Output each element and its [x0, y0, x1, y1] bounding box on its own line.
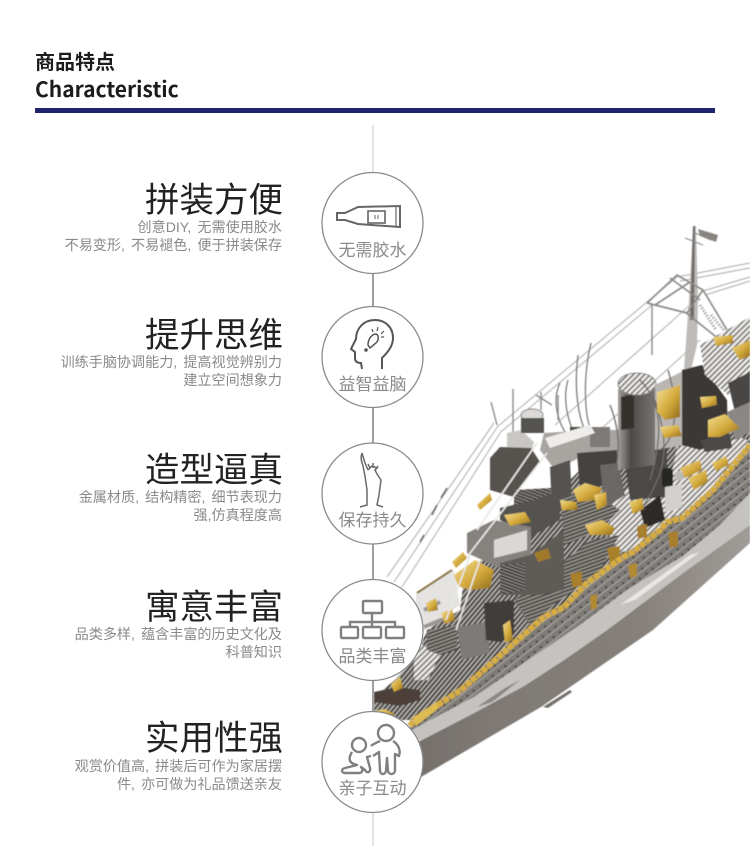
- feature text 3: [79, 452, 283, 522]
- description: 训练手脑协调能力, 提高视觉辨别力: [61, 354, 282, 370]
- ship rigging wires: [387, 263, 750, 587]
- description: [61, 354, 282, 388]
- feature circle 2: brain: [322, 306, 423, 408]
- icon: glue tube: [337, 206, 400, 227]
- description: [75, 758, 282, 792]
- description: 创意DIY, 无需使用胶水: [138, 219, 282, 235]
- gold armour and details: [374, 335, 750, 717]
- icon: parent and child: [342, 725, 400, 774]
- feature circle 1: no glue: [322, 172, 423, 274]
- label: parent-child interaction: 亲子互动: [338, 779, 406, 798]
- white diagonal stays: [446, 443, 547, 630]
- feature circle 4: categories: [322, 580, 423, 680]
- keel fin: [543, 690, 572, 708]
- description: [75, 626, 282, 660]
- description: [79, 489, 282, 522]
- feature text 5: [75, 720, 283, 792]
- funnel and after tower: [600, 317, 750, 528]
- heading: 寓意丰富: [145, 589, 283, 627]
- icon: organisation chart: [341, 601, 404, 638]
- silver deck edge band: [408, 493, 750, 741]
- description: 强,仿真程度高: [194, 506, 282, 522]
- title: English: Characteristic: [35, 74, 179, 104]
- section title block: [35, 52, 179, 104]
- label: categories: 品类丰富: [338, 647, 406, 666]
- feature text 4: [75, 589, 283, 660]
- heading: 提升思维: [145, 317, 283, 355]
- main illustration: ship, timeline and icons: [321, 125, 750, 846]
- description: 建立空间想象力: [183, 372, 282, 388]
- forward guns and light deck: [374, 570, 514, 706]
- feature circle 3: statue: [322, 443, 423, 544]
- navy header rule: [35, 108, 715, 113]
- icon: head with light bulb: [351, 320, 393, 369]
- label: durable: 保存持久: [338, 511, 406, 530]
- timeline vertical line: [372, 125, 374, 846]
- gold deck rail: [410, 445, 750, 726]
- title: Chinese: 商品特点: [35, 52, 115, 74]
- description: [65, 219, 282, 252]
- description: 科普知识: [226, 644, 282, 660]
- description: 件, 亦可做为礼品馈送亲友: [117, 776, 282, 792]
- mast and fighting top: [647, 226, 730, 370]
- icon: statue of liberty: [360, 453, 383, 507]
- feature text 2: [61, 317, 283, 388]
- gold rail fore block: [413, 702, 439, 726]
- description: 品类多样, 蕴含丰富的历史文化及: [75, 626, 282, 642]
- label: no glue: 无需胶水: [338, 241, 406, 260]
- heading: 拼装方便: [145, 182, 283, 220]
- feature circle 5: parent-child: [322, 712, 423, 812]
- perforated side band: [408, 445, 750, 732]
- metal model battleship: [374, 226, 750, 800]
- feature text 1: [65, 182, 283, 252]
- description: 不易变形, 不易褪色, 便于拼装保存: [65, 236, 282, 252]
- label: brain: 益智益脑: [338, 375, 406, 394]
- description: 观赏价值高, 拼装后可作为家居摆: [75, 758, 282, 774]
- heading: 造型逼真: [145, 452, 283, 490]
- heading: 实用性强: [145, 720, 283, 758]
- upper deck stripes: [374, 400, 750, 720]
- description: 金属材质, 结构精密, 细节表现力: [79, 489, 282, 505]
- hull: [419, 525, 750, 778]
- forward superstructure: [467, 409, 667, 595]
